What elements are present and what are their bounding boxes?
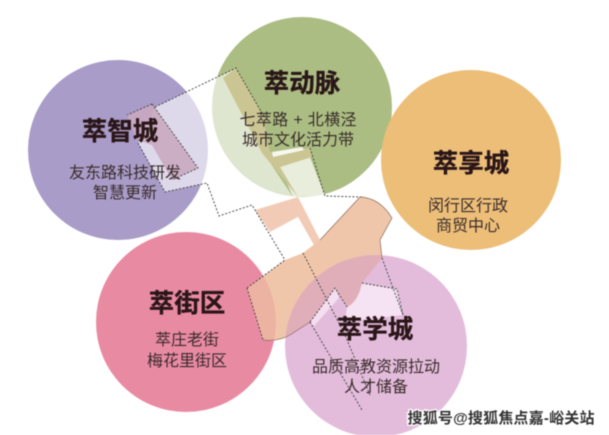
label: orange circle bbox=[428, 149, 510, 235]
description: 友东路科技研发 bbox=[69, 164, 181, 182]
white block centre bbox=[270, 217, 315, 260]
heading: 萃智城 bbox=[82, 117, 159, 146]
outline of district bbox=[263, 197, 392, 340]
description: 七萃路 + 北横泾 bbox=[240, 111, 356, 129]
white block lower right bbox=[345, 283, 403, 322]
tan block on purple bbox=[127, 104, 198, 180]
heading: 萃街区 bbox=[149, 290, 225, 318]
label: purple circle: 智慧更新 bbox=[93, 184, 157, 202]
road strip bbox=[223, 68, 312, 197]
label: pink circle bbox=[147, 290, 227, 370]
pink overlap with district bbox=[248, 277, 276, 340]
site map overlay bbox=[127, 68, 403, 410]
heading: 萃动脉 bbox=[264, 70, 341, 98]
label: orange circle: 商贸中心 bbox=[436, 217, 500, 235]
label: purple circle bbox=[69, 117, 181, 202]
peach block centre bbox=[255, 197, 320, 247]
peach district bbox=[247, 197, 392, 340]
circle: green bbox=[212, 17, 392, 197]
label: pink circle: 梅花里街区 bbox=[147, 352, 227, 370]
circle: orange bbox=[381, 70, 561, 250]
circle: pink bbox=[96, 232, 276, 412]
white strip lower bbox=[310, 288, 339, 326]
small white strip bbox=[272, 147, 304, 157]
label: light pink circle: 人才储备 bbox=[344, 378, 408, 396]
circle: purple bbox=[28, 60, 208, 240]
description: 闵行区行政 bbox=[428, 197, 508, 215]
circle: light pink bbox=[285, 255, 467, 435]
mauve overlap on light pink bbox=[286, 255, 382, 336]
dashed boundary bbox=[127, 68, 403, 410]
label: green circle bbox=[240, 70, 356, 149]
white block upper left bbox=[138, 68, 293, 216]
heading: 萃学城 bbox=[337, 315, 414, 344]
white block on green bbox=[280, 157, 325, 197]
label: green circle: 城市文化活力带 bbox=[242, 131, 354, 149]
description: 萃庄老街 bbox=[155, 331, 219, 349]
watermark: 搜狐号@搜狐焦点嘉-峪关站 bbox=[408, 409, 594, 427]
description: 品质高教资源拉动 bbox=[312, 358, 440, 376]
label: light pink circle bbox=[312, 315, 440, 396]
heading: 萃享城 bbox=[433, 149, 510, 178]
